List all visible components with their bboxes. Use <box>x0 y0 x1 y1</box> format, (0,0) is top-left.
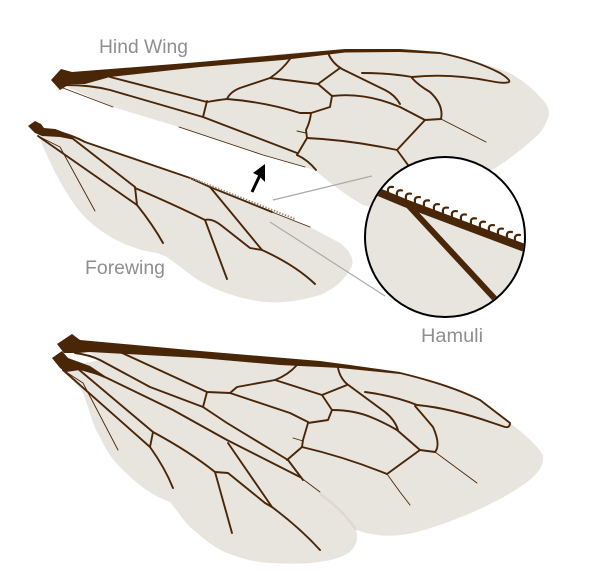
label: Hamuli: Hamuli <box>421 326 483 347</box>
magnifier outline <box>365 157 525 317</box>
combined forewing base <box>52 351 108 378</box>
label: Hind Wing: Hind Wing <box>99 37 188 58</box>
magnifier disc <box>365 157 525 317</box>
forewing membrane <box>38 132 352 302</box>
top hind wing <box>51 49 549 215</box>
combined hind wing base and leading vein <box>57 334 400 374</box>
combined forewing membrane <box>62 360 357 564</box>
hind wing membrane <box>60 49 549 215</box>
forewing veins <box>42 130 210 187</box>
combined wings <box>52 334 543 564</box>
callout leader lines <box>270 176 385 296</box>
top forewing <box>28 121 352 302</box>
combined hind wing membrane <box>78 345 543 536</box>
hamuli ticks <box>190 178 295 219</box>
label: Forewing: Forewing <box>85 258 165 279</box>
magnified hooks <box>388 187 520 240</box>
combined hind wing veins <box>365 373 510 427</box>
combined forewing veins <box>80 367 300 477</box>
forewing base <box>28 121 75 140</box>
magnified veins <box>376 191 530 250</box>
hind wing veins <box>362 53 509 83</box>
magnified membrane <box>366 196 522 316</box>
overlap shading <box>320 494 356 530</box>
magnifier: hamuli detail <box>364 156 526 318</box>
arrow <box>252 164 265 192</box>
hind wing base and leading vein <box>51 49 440 90</box>
